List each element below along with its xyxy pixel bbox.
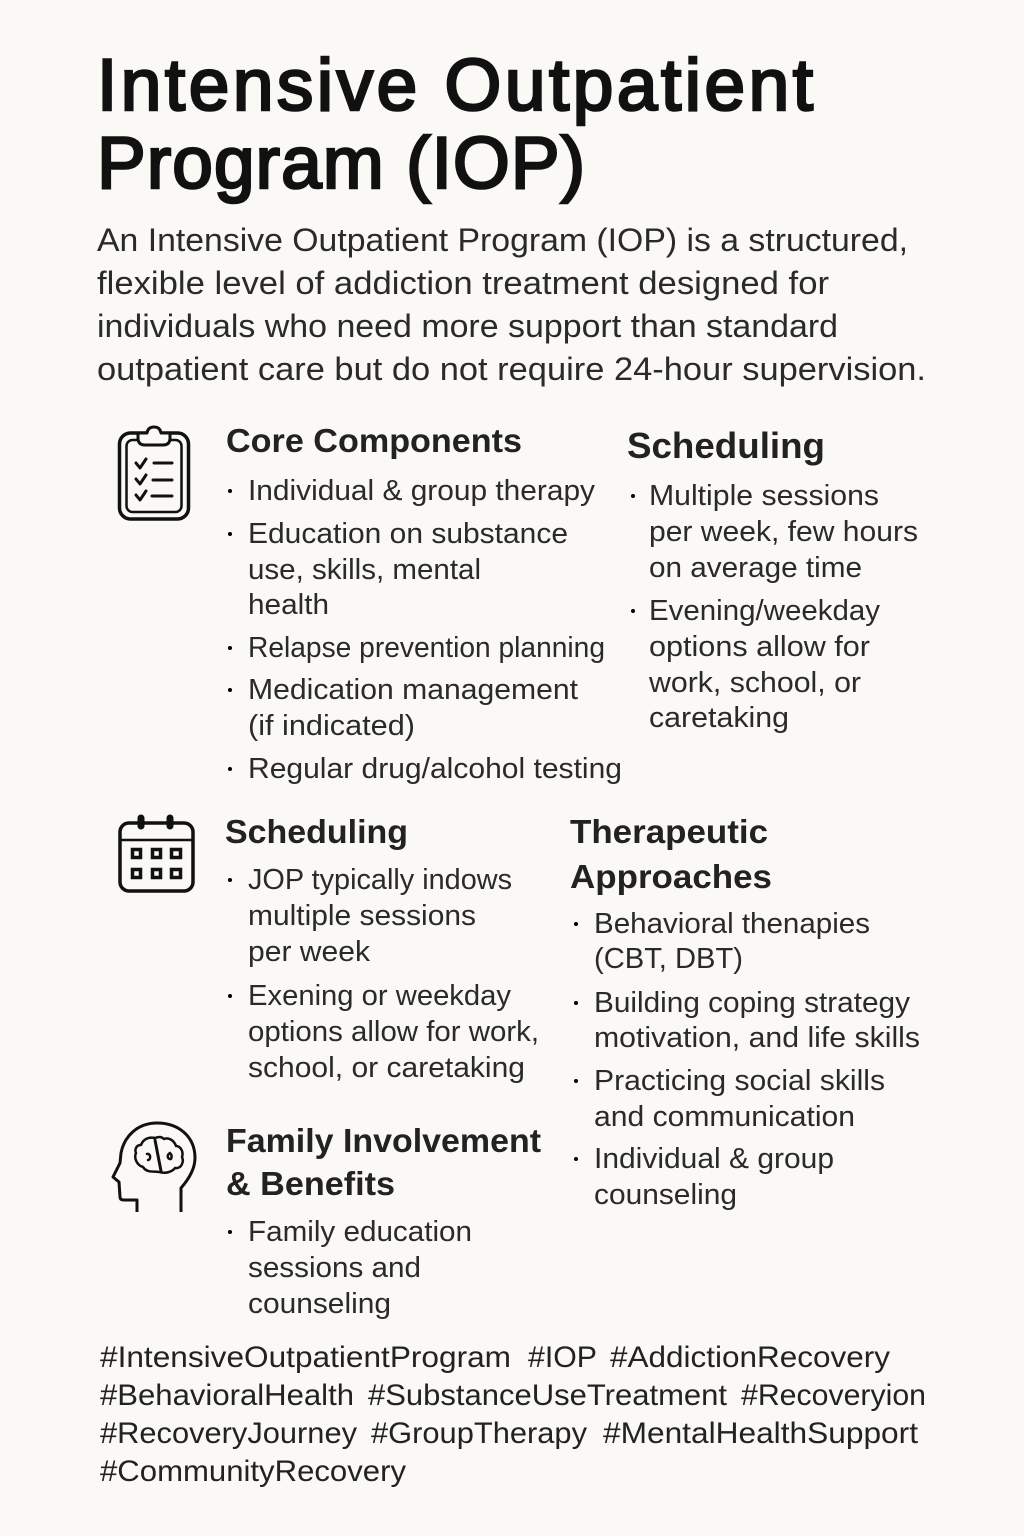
heading: scheduling left: Scheduling	[225, 813, 408, 850]
intro text: An Intensive Outpatient Program (IOP) is a structured,	[97, 222, 908, 258]
list: scheduling left: JOP typically indows	[248, 864, 512, 896]
intro text	[97, 222, 926, 387]
hashtags: #MentalHealthSupport	[603, 1417, 919, 1450]
list: scheduling left: Exening or weekday	[248, 980, 512, 1012]
list: core components	[228, 475, 622, 785]
heading: therapeutic approaches	[570, 813, 772, 895]
hashtags: #BehavioralHealth	[100, 1379, 354, 1412]
list: scheduling right	[631, 480, 918, 734]
list: therapeutic approaches: (CBT, DBT)	[594, 943, 743, 975]
list: scheduling left: school, or caretaking	[248, 1052, 525, 1084]
intro text: flexible level of addiction treatment designed for	[97, 265, 829, 301]
heading: family involvement	[226, 1122, 541, 1202]
list: core components: health	[248, 589, 329, 621]
list: core components: Regular drug/alcohol testing	[248, 753, 622, 785]
hashtags: #SubstanceUseTreatment	[368, 1379, 728, 1412]
panel: scheduling right	[627, 425, 918, 734]
hashtags: #RecoveryJourney	[100, 1417, 357, 1450]
title	[97, 45, 813, 204]
heading: core components: Core Components	[226, 422, 522, 459]
list: therapeutic approaches: Individual & group	[594, 1143, 834, 1175]
icon: clipboard	[120, 427, 188, 519]
list: scheduling right: caretaking	[649, 702, 789, 734]
panel: therapeutic approaches	[570, 813, 920, 1211]
list: scheduling left: options allow for work,	[248, 1016, 539, 1048]
panel: core components	[226, 422, 622, 785]
panel: scheduling left	[225, 813, 539, 1084]
list: scheduling left: multiple sessions	[248, 900, 476, 932]
hashtags: #AddictionRecovery	[610, 1341, 890, 1374]
list: scheduling right: work, school, or	[648, 667, 861, 699]
list: core components: Individual & group therapy	[248, 475, 596, 507]
list: scheduling right: Evening/weekday	[649, 595, 880, 627]
title: Program (IOP)	[97, 123, 585, 204]
list: core components: Medication management	[248, 674, 578, 706]
list: therapeutic approaches: Behavioral thenapies	[594, 908, 870, 940]
list: scheduling left: per week	[248, 936, 371, 968]
list: therapeutic approaches: Building coping strategy	[594, 987, 911, 1019]
heading: therapeutic approaches: Approaches	[570, 858, 772, 895]
hashtags: #CommunityRecovery	[100, 1455, 406, 1488]
list: family involvement: counseling	[248, 1288, 391, 1320]
list: family involvement: sessions and	[248, 1252, 421, 1284]
list: core components: Relapse prevention planning	[248, 632, 605, 664]
panel: family involvement	[226, 1122, 541, 1320]
list: therapeutic approaches: motivation, and life skills	[594, 1022, 920, 1054]
list: therapeutic approaches: Practicing social skills	[594, 1065, 885, 1097]
hashtags: #Recoveryion	[741, 1379, 926, 1412]
list: scheduling right: per week, few hours	[649, 516, 918, 548]
list: core components: use, skills, mental	[248, 554, 481, 586]
hashtags: #IntensiveOutpatientProgram	[100, 1341, 511, 1374]
list: scheduling right: options allow for	[649, 631, 870, 663]
heading: family involvement: Family Involvement	[226, 1122, 541, 1159]
icon: calendar	[120, 818, 193, 891]
hashtags: #GroupTherapy	[371, 1417, 587, 1450]
list: family involvement	[228, 1216, 472, 1320]
title: Intensive Outpatient	[97, 45, 813, 126]
list: scheduling right: Multiple sessions	[649, 480, 879, 512]
list: therapeutic approaches: counseling	[594, 1179, 737, 1211]
heading: scheduling right: Scheduling	[627, 425, 825, 466]
hashtags: #IOP	[528, 1341, 597, 1374]
intro text: individuals who need more support than standard	[97, 308, 838, 344]
list: therapeutic approaches	[574, 908, 920, 1211]
icon: head with brain	[113, 1123, 195, 1212]
list: scheduling left	[228, 864, 539, 1084]
list: core components: (if indicated)	[248, 710, 415, 742]
list: therapeutic approaches: and communication	[594, 1101, 855, 1133]
hashtags	[100, 1341, 926, 1488]
intro text: outpatient care but do not require 24-hour supervision.	[97, 351, 926, 387]
heading: therapeutic approaches: Therapeutic	[570, 813, 768, 850]
list: scheduling right: on average time	[649, 552, 862, 584]
list: core components: Education on substance	[248, 518, 568, 550]
heading: family involvement: & Benefits	[226, 1165, 395, 1202]
list: family involvement: Family education	[248, 1216, 472, 1248]
